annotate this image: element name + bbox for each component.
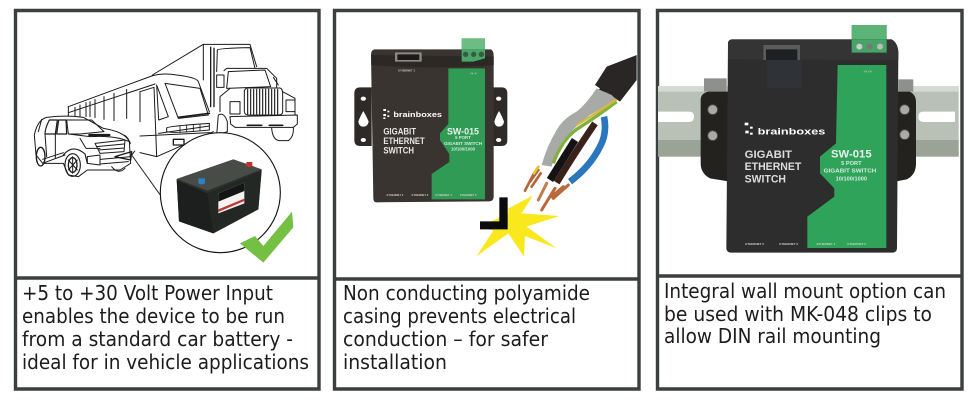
caption: DIN rail mounting: allow DIN rail mounting xyxy=(664,324,881,348)
illustration: switch with wires xyxy=(354,38,637,257)
caption: polyamide casing: Non conducting polyamide xyxy=(343,281,590,305)
panel: DIN rail mounting xyxy=(658,10,962,389)
green panel xyxy=(432,68,485,199)
caption: power input: enables the device to be run xyxy=(22,304,285,328)
device title: GIGABIT xyxy=(745,149,792,161)
callout lines xyxy=(130,151,173,213)
illustration: switch on DIN rail: 10/100/1000 xyxy=(836,176,867,182)
caption: polyamide casing: casing prevents electrical xyxy=(343,304,576,328)
illustration: switch with wires: brainboxes xyxy=(393,110,442,119)
port labels: ETHERNET 4 xyxy=(817,242,836,246)
port labels: ETHERNET 5 xyxy=(460,193,477,197)
icon: truck xyxy=(152,44,297,141)
port labels: ETHERNET 4 xyxy=(435,193,452,197)
brand logo xyxy=(383,109,389,119)
device title: SWITCH xyxy=(383,145,414,155)
caption: power input: from a standard car battery - xyxy=(22,327,293,351)
device title: ETHERNET xyxy=(383,136,425,146)
port labels: ETHERNET 2 xyxy=(387,193,404,197)
caption: power input: +5 to +30 Volt Power Input xyxy=(22,281,273,305)
icon: terminal connector xyxy=(852,25,887,53)
port labels: ETHERNET 5 xyxy=(847,242,866,246)
panel frame xyxy=(334,10,639,389)
panel frame xyxy=(658,10,962,389)
icon: green check mark xyxy=(240,212,293,263)
switch body xyxy=(371,49,494,202)
device title: ETHERNET xyxy=(745,161,802,173)
ethernet port with cover xyxy=(763,45,800,60)
icon: car xyxy=(34,116,132,177)
icon: DIN rail xyxy=(658,86,959,157)
brand logo xyxy=(745,123,753,135)
illustration: switch on DIN rail xyxy=(658,25,959,253)
illustration: switch with wires: 10/100/1000 xyxy=(451,147,476,152)
panel: power input xyxy=(16,10,319,389)
caption: polyamide casing: installation xyxy=(343,350,447,374)
device title: SWITCH xyxy=(745,174,786,186)
illustration: switch on DIN rail: brainboxes xyxy=(758,126,825,136)
port labels: ETHERNET 3 xyxy=(779,242,798,246)
model label: SW-015 xyxy=(447,126,479,136)
port labels: ETHERNET 1 xyxy=(398,68,415,72)
panel frame xyxy=(16,10,319,389)
icon: bus xyxy=(68,74,213,157)
port labels: +V -V xyxy=(470,72,477,76)
icon: car battery xyxy=(177,159,262,233)
icon: magnifier circle xyxy=(160,133,280,253)
illustration: switch on DIN rail: 5 PORT xyxy=(841,161,862,167)
illustration: switch with wires: GIGABIT SWITCH xyxy=(444,141,482,146)
model label: SW-015 xyxy=(831,148,872,160)
panel: polyamide casing xyxy=(334,10,639,389)
port labels: ETHERNET 3 xyxy=(412,193,429,197)
icon: cable with wires xyxy=(525,55,637,210)
icon: mounting clips xyxy=(704,78,913,93)
ethernet port xyxy=(395,52,422,62)
illustration: switch on DIN rail: GIGABIT SWITCH xyxy=(824,169,876,175)
illustration: vehicles with battery xyxy=(34,44,297,263)
icon: yellow spark xyxy=(477,196,559,257)
port labels: +V +V xyxy=(863,70,872,74)
caption: DIN rail mounting: be used with MK-048 clips to xyxy=(664,302,932,326)
green panel xyxy=(807,65,886,248)
icon: black ground corner xyxy=(480,197,508,229)
switch body xyxy=(726,39,898,253)
illustration: switch with wires: 5 PORT xyxy=(455,135,471,140)
icon: terminal connector xyxy=(462,38,485,62)
caption: DIN rail mounting: Integral wall mount option can xyxy=(664,279,946,303)
port labels: ETHERNET 2 xyxy=(745,242,764,246)
caption: power input: ideal for in vehicle applications xyxy=(22,350,309,374)
device title: GIGABIT xyxy=(383,127,416,137)
icon: mounting tabs xyxy=(354,87,507,146)
caption: polyamide casing: conduction – for safer xyxy=(343,327,549,351)
